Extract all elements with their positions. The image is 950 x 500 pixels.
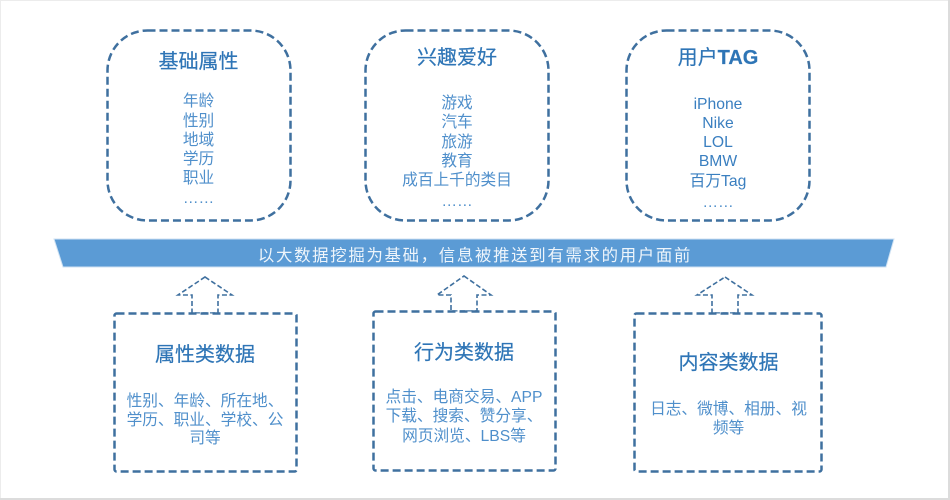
list: user tags: LOL (703, 134, 733, 151)
text: behaviour data details (386, 388, 542, 445)
list: interests: …… (441, 193, 473, 210)
list: interests: 教育 (441, 152, 473, 170)
text: attribute data details: 学历、职业、学校、公 (127, 411, 284, 429)
heading: behaviour data: 行为类数据 (414, 341, 514, 364)
panel: interests (366, 30, 548, 220)
list: interests: 游戏 (441, 94, 473, 112)
list: basic attributes (183, 92, 214, 207)
panel: content data (634, 314, 822, 472)
panel: attribute data (114, 314, 296, 472)
arrow: content data up (697, 277, 752, 313)
heading: basic attributes: 基础属性 (158, 50, 238, 73)
list: interests: 成百上千的类目 (402, 171, 512, 189)
text: attribute data details (127, 392, 284, 447)
text: behaviour data details: 下载、搜索、赞分享、 (386, 407, 542, 425)
text: attribute data details: 司等 (189, 429, 221, 447)
list: basic attributes: 性别 (183, 112, 214, 130)
list: interests: 汽车 (441, 113, 473, 131)
list: basic attributes: 职业 (183, 169, 214, 187)
arrow: behaviour data up (437, 276, 491, 311)
heading: interests: 兴趣爱好 (417, 46, 497, 69)
text: content data details: 日志、微博、相册、视 (650, 400, 807, 418)
list: basic attributes: …… (183, 190, 214, 207)
list: user tags: Nike (702, 115, 734, 132)
heading: user tags: 用户TAG (678, 46, 758, 69)
arrow: attribute data up (178, 277, 232, 313)
list: basic attributes: 地域 (183, 131, 214, 149)
text: content data details (650, 400, 807, 437)
panel: user tags (626, 30, 810, 220)
banner (54, 239, 894, 267)
panel: basic attributes (108, 30, 290, 220)
text: content data details: 频等 (713, 419, 744, 437)
text: attribute data details: 性别、年龄、所在地、 (127, 392, 283, 410)
list: user tags: BMW (699, 153, 737, 170)
banner text: 以大数据挖掘为基础，信息被推送到有需求的用户面前 (258, 247, 692, 265)
text: behaviour data details: 点击、电商交易、APP (386, 388, 542, 406)
heading: content data: 内容类数据 (678, 351, 778, 374)
panel: behaviour data (374, 312, 556, 470)
heading: attribute data: 属性类数据 (155, 343, 255, 366)
list: user tags: 百万Tag (690, 173, 746, 190)
list: interests: 旅游 (441, 133, 473, 151)
text: behaviour data details: 网页浏览、LBS等 (402, 427, 526, 445)
list: user tags: iPhone (694, 96, 743, 113)
list: user tags (690, 96, 746, 211)
list: interests (402, 94, 512, 210)
list: basic attributes: 年龄 (183, 92, 214, 110)
list: user tags: …… (702, 194, 734, 211)
list: basic attributes: 学历 (183, 150, 214, 168)
